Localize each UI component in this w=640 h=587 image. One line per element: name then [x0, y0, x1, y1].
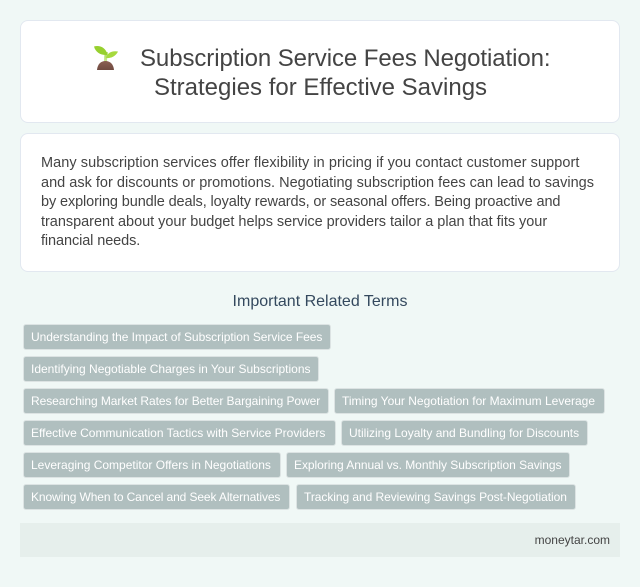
- tag: Understanding the Impact of Subscription Service Fees: [31, 330, 322, 344]
- tag list: [23, 324, 605, 510]
- description text: Many subscription services offer flexibility in pricing if you contact customer support: [41, 155, 579, 171]
- panel: header: [20, 20, 620, 123]
- icon: seedling: [94, 46, 118, 70]
- tag: [23, 324, 331, 350]
- footer source: moneytar.com: [535, 533, 610, 547]
- description text: by exploring bundle deals, loyalty rewards, or seasonal offers. Being proactive and: [41, 194, 560, 210]
- tag: [341, 420, 588, 446]
- tag: [286, 452, 570, 478]
- footer bar: [20, 523, 620, 557]
- heading: related terms: Important Related Terms: [233, 293, 407, 310]
- title: Subscription Service Fees Negotiation:: [140, 45, 551, 72]
- tag: Timing Your Negotiation for Maximum Leverage: [342, 394, 595, 408]
- description text: [41, 155, 594, 249]
- tag: [334, 388, 605, 414]
- tag: Identifying Negotiable Charges in Your Subscriptions: [31, 362, 311, 376]
- title: [140, 45, 551, 101]
- tag: [23, 356, 319, 382]
- tag: [23, 452, 281, 478]
- tag: Utilizing Loyalty and Bundling for Discounts: [349, 426, 579, 440]
- tag: [23, 420, 336, 446]
- tag: Researching Market Rates for Better Bargaining Power: [31, 394, 320, 408]
- tag: Effective Communication Tactics with Service Providers: [31, 426, 325, 440]
- tag: Exploring Annual vs. Monthly Subscription Savings: [294, 458, 562, 472]
- title: Strategies for Effective Savings: [154, 74, 487, 101]
- description text: transparent about your budget helps service providers tailor a plan that fits your: [41, 214, 547, 230]
- tag: [23, 388, 329, 414]
- panel: description: [20, 133, 620, 272]
- tag: [296, 484, 576, 510]
- description text: financial needs.: [41, 233, 140, 249]
- tag: Leveraging Competitor Offers in Negotiations: [31, 458, 271, 472]
- tag: [23, 484, 290, 510]
- tag: Knowing When to Cancel and Seek Alternatives: [31, 490, 280, 504]
- description text: and ask for discounts or promotions. Negotiating subscription fees can lead to savings: [41, 174, 594, 190]
- tag: Tracking and Reviewing Savings Post-Negotiation: [304, 490, 567, 504]
